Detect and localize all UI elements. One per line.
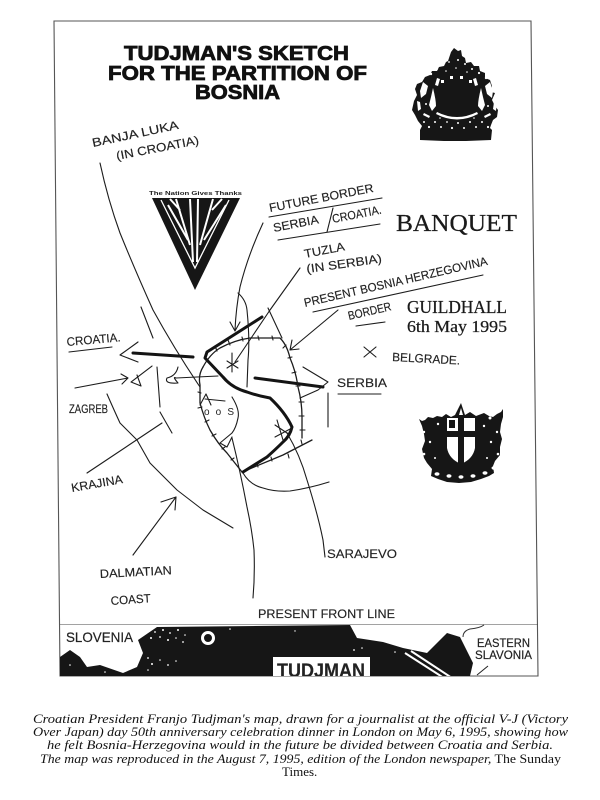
caption [33,711,568,779]
icon: VJ day triangle logo: The Nation Gives Thanks [149,191,242,197]
handwritten label: future border: FUTURE BORDER [268,181,375,215]
Tudjman label box: TUDJMAN [277,661,365,682]
thick arrow to Serbia [255,367,328,398]
handwritten label: Tuzla: TUZLA [303,239,346,261]
Tuzla pointer line [235,268,300,362]
handwritten label: Banja Luka: BANJA LUKA [91,118,180,150]
banquet heading: BANQUET [396,211,517,237]
present Bosnia barbed border [198,336,312,472]
bottom newspaper map strip [60,624,538,676]
thick arrow to Croatia [120,342,193,362]
handwritten label: present front line: PRESENT FRONT LINE [258,607,395,621]
handwritten label: Dalmatian Coast [99,563,172,608]
Guildhall date text: GUILDHALL [407,297,507,317]
vertical sketch lines [238,293,328,427]
handwritten label: present Bosnia Herzegovina border: BORDER [347,299,393,323]
future border thick line [205,317,292,472]
Guildhall date text: 6th May 1995 [407,317,507,336]
title: TUDJMAN'S SKETCH [124,43,349,65]
lower arc [243,473,329,491]
handwritten label: future border [268,181,383,240]
icon: VJ day triangle logo [149,191,242,290]
left sketch strokes and arrow [75,307,218,433]
Guildhall date text [407,297,507,336]
border pointer arrow [290,310,338,350]
caption: Croatian President Franjo Tudjman's map, drawn for a journalist at the official V-J (Victory [33,711,568,726]
handwritten label: Sarajevo: SARAJEVO [327,547,397,561]
strip top rule [60,624,538,625]
Krajina pointer line [87,423,162,473]
caption: Over Japan) day 50th anniversary celebration dinner in London on May 6, 1995, showing how [33,724,568,739]
handwritten label: Serbia [337,376,387,394]
handwritten label: future border: CROATIA. [331,203,383,226]
icon: royal coat of arms [412,48,498,141]
handwritten label: Banja Luka: (IN CROATIA) [115,133,200,163]
caption: Times. [282,764,317,779]
present front line stroke [232,438,254,598]
title: BOSNIA [195,82,280,104]
river line [463,625,484,637]
title [108,43,367,104]
Eastern Slavonia label: SLAVONIA [475,648,532,662]
speckled terrain [69,628,396,673]
Slovenia label: SLOVENIA [66,629,134,645]
black land mass [60,625,473,676]
coast line [107,394,233,528]
document frame [54,21,538,676]
handwritten label: Serbia: SERBIA [337,376,387,390]
Eastern Slavonia pointer [477,666,488,675]
Sarajevo pointer line [287,433,325,557]
caption: The map was reproduced in the August 7, 1995, edition of the London newspaper, The Sunday [40,751,562,766]
Belgrade marker: BELGRADE. [392,350,460,368]
Dalmatian coast pointer arrow [133,497,176,555]
handwritten label: Krajina: KRAJINA [70,472,124,495]
Belgrade marker [364,347,460,368]
handwritten label: Croatia: CROATIA. [66,330,121,349]
handwritten label: Dalmatian Coast: COAST [110,591,152,608]
caption: he felt Bosnia-Herzegovina would in the future be divided between Croatia and Serbia. [47,737,553,752]
handwritten label: Dalmatian Coast: DALMATIAN [99,563,172,581]
handwritten label: present Bosnia Herzegovina border: PRESENT BOSNIA HERZEGOVINA [303,254,489,310]
handwritten label: Zagreb: ZAGREB [69,402,108,416]
Banja Luka pointer line [100,163,200,387]
white diagonal road stripes [404,650,451,676]
handwritten label: Tuzla [303,239,383,276]
icon: City of London crest [419,403,503,483]
handwritten label: future border: SERBIA [272,212,320,235]
future border pointer arrow [230,223,263,331]
handwritten label: Banja Luka [91,118,200,163]
Tudjman label box [273,657,370,676]
Eastern Slavonia label [476,638,532,660]
Tuzla cross and place scribbles: ooS [204,407,234,418]
title: FOR THE PARTITION OF [108,63,367,85]
Eastern Slavonia label: EASTERN [477,636,530,650]
Tuzla cross and place scribbles [200,353,292,440]
handwritten label: Tuzla: (IN SERBIA) [305,252,383,276]
city ring marker [202,632,214,644]
